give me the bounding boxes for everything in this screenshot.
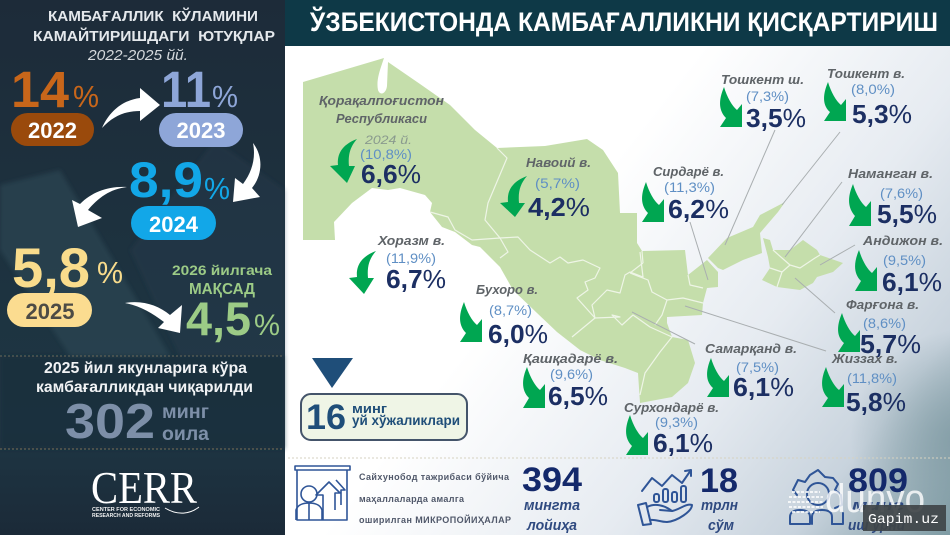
stat: 5,8% 2025: 2025 xyxy=(26,299,74,324)
left title: 2022-2025 йй. xyxy=(87,47,188,64)
stat: 8,9% 2024: % xyxy=(204,171,230,206)
region: Karakalpakstan: (10,8%) xyxy=(360,146,412,162)
panel: left achievements xyxy=(0,0,285,535)
callout: 16 thousand households: 16 xyxy=(306,398,346,437)
region: Kashkadarya: Қашқадарё в. xyxy=(523,351,618,366)
left title: КАМБАҒАЛЛИК КЎЛАМИНИ xyxy=(48,7,258,25)
stat: 18 trillion sum: сўм xyxy=(708,517,734,534)
region: Surkhandarya: 6,1% xyxy=(653,428,713,458)
stat: 2026 target 4,5%: % xyxy=(254,309,280,342)
text: Saikhunobod microprojects: Сайхунобод тажрибаси бўйича xyxy=(359,472,510,482)
arrow: 2025 to target xyxy=(125,302,182,333)
region: Khorezm: (11,9%) xyxy=(386,250,436,266)
region: Karakalpakstan: Қорақалпоғистон xyxy=(319,93,444,108)
stat: 809 thousand jobs: иш ўрни xyxy=(848,517,905,534)
text: Saikhunobod microprojects: оширилган МИКРОПОЙИҲАЛАР xyxy=(359,514,511,525)
region: Tashkent city: (7,3%) xyxy=(746,88,789,104)
region: Khorezm: Хоразм в. xyxy=(377,233,445,248)
region: Navoi: 4,2% xyxy=(528,192,590,222)
stat: 394 thousand projects xyxy=(522,461,582,534)
region: Surkhandarya: (9,3%) xyxy=(655,414,698,430)
region: Bukhara: Бухоро в. xyxy=(476,282,538,297)
region: Namangan: Наманган в. xyxy=(848,166,933,181)
stat: 809 thousand jobs xyxy=(848,462,908,534)
region: Fergana: 5,7% xyxy=(860,329,921,359)
region: Bukhara: (8,7%) xyxy=(489,302,532,318)
stat: 5,8% 2025 xyxy=(7,236,123,327)
stat: 14% 2022: % xyxy=(73,79,99,114)
region: Andijan: Андижон в. xyxy=(862,233,943,248)
map of Uzbekistan xyxy=(303,58,855,403)
header bar xyxy=(285,0,950,46)
watermark: Gapim.uz: Gapim.uz xyxy=(868,512,939,528)
leader lines xyxy=(632,130,855,351)
stat: 8,9% 2024: 2024 xyxy=(149,212,199,237)
stat: 11% 2023: 11 xyxy=(161,61,211,118)
arrow: 2024 to 2025 xyxy=(72,187,127,227)
region: Navoi: (5,7%) xyxy=(535,175,580,191)
region: Fergana: Фарғона в. xyxy=(846,297,919,312)
stat: 18 trillion sum: 18 xyxy=(700,462,738,500)
stat: 809 thousand jobs: 809 xyxy=(848,462,908,500)
region: Andijan: (9,5%) xyxy=(883,252,926,268)
region: Karakalpakstan: 6,6% xyxy=(361,159,421,189)
callout: 16 thousand households: минг xyxy=(352,401,388,416)
stat: 302 thousand families: оила xyxy=(162,424,209,445)
panel: map background xyxy=(285,45,950,535)
stat: 2026 target 4,5%: 4,5 xyxy=(186,292,251,345)
region: Fergana: (8,6%) xyxy=(863,315,906,331)
stat: 14% 2022: 14 xyxy=(11,61,70,118)
callout: 16 thousand households: уй хўжаликлари xyxy=(352,412,460,428)
region: Tashkent oblast xyxy=(824,66,912,129)
logo: CERR: CERR xyxy=(91,462,197,513)
region: Surkhandarya xyxy=(624,400,719,458)
region: Tashkent oblast: (8,0%) xyxy=(851,81,895,97)
region: Andijan: 6,1% xyxy=(882,267,942,297)
region: Andijan xyxy=(855,233,943,297)
logo: CERR: CENTER FOR ECONOMIC xyxy=(92,507,160,513)
text: Saikhunobod microprojects: маҳаллаларда амалга xyxy=(359,494,465,504)
region: Jizzakh xyxy=(822,351,906,417)
stat: 2026 target 4,5%: МАҚСАД xyxy=(189,281,256,298)
left title xyxy=(33,7,275,64)
stat: 2026 target 4,5% xyxy=(172,263,280,345)
stat: 8,9% 2024: 8,9 xyxy=(129,152,203,208)
region: Tashkent oblast: 5,3% xyxy=(852,99,912,129)
region: Samarkand: 6,1% xyxy=(733,372,794,402)
region: Syrdarya: 6,2% xyxy=(668,194,729,224)
stat: 14% 2022: 2022 xyxy=(28,118,77,143)
stat: 809 thousand jobs: минг xyxy=(852,497,904,514)
text: results 2025 xyxy=(36,360,253,396)
stat: 11% 2023: % xyxy=(212,79,238,114)
region: Tashkent city: 3,5% xyxy=(746,103,806,133)
region: Tashkent oblast: Тошкент в. xyxy=(827,66,905,81)
watermark: dunyo xyxy=(788,477,925,521)
stat: 302 thousand families: минг xyxy=(162,402,209,423)
stat: 8,9% 2024 xyxy=(129,152,230,240)
region: Surkhandarya: Сурхондарё в. xyxy=(624,400,719,415)
region: Samarkand xyxy=(705,341,797,402)
stat: 302 thousand families xyxy=(65,395,209,449)
stat: 11% 2023: 2023 xyxy=(177,118,225,143)
stat: 5,8% 2025: % xyxy=(97,255,123,290)
arrow: 2022 to 2023 xyxy=(102,88,160,128)
stat: 18 trillion sum: трлн xyxy=(701,497,738,514)
icon: gear with workers xyxy=(790,470,843,524)
region: Khorezm xyxy=(349,233,446,294)
region: Jizzakh: 5,8% xyxy=(846,387,906,417)
region: Karakalpakstan: 2024 й. xyxy=(364,133,412,147)
stat: 2026 target 4,5%: 2026 йилгача xyxy=(172,263,273,278)
region: Namangan: (7,6%) xyxy=(880,185,923,201)
region: Jizzakh: Жиззах в. xyxy=(831,351,898,366)
region: Kashkadarya: (9,6%) xyxy=(550,366,593,382)
stat: 394 thousand projects: лойиҳа xyxy=(526,517,577,534)
left title: КАМАЙТИРИШДАГИ ЮТУҚЛАР xyxy=(33,27,275,45)
region: Tashkent city: Тошкент ш. xyxy=(721,72,804,87)
region: Jizzakh: (11,8%) xyxy=(847,370,897,386)
icon: hand with growth chart xyxy=(638,470,692,525)
callout: 16 thousand households xyxy=(301,394,467,440)
region: Navoi: Навоий в. xyxy=(526,155,591,170)
region: Tashkent city xyxy=(720,72,806,133)
region: Navoi xyxy=(500,155,591,222)
region: Samarkand: (7,5%) xyxy=(736,359,779,375)
stat: 18 trillion sum xyxy=(700,462,738,534)
watermark: Gapim.uz xyxy=(863,505,946,531)
stat: 14% 2022 xyxy=(11,61,99,146)
region: Namangan xyxy=(848,166,937,229)
region: Karakalpakstan: Республикаси xyxy=(336,111,427,126)
region: Kashkadarya xyxy=(523,351,618,411)
stat: 5,8% 2025: 5,8 xyxy=(12,236,90,299)
region: Namangan: 5,5% xyxy=(877,199,937,229)
icon: down triangle xyxy=(312,358,353,388)
region: Bukhara: 6,0% xyxy=(488,319,548,349)
region: Samarkand: Самарқанд в. xyxy=(705,341,797,356)
region: Kashkadarya: 6,5% xyxy=(548,381,608,411)
arrow: 2023 to 2024 xyxy=(233,143,260,202)
text: results 2025: 2025 йил якунларига кўра xyxy=(44,360,247,377)
region: Syrdarya: (11,3%) xyxy=(664,179,715,195)
stat: 394 thousand projects: 394 xyxy=(522,461,582,499)
region: Syrdarya: Сирдарё в. xyxy=(653,164,724,179)
stat: 302 thousand families: 302 xyxy=(65,395,155,449)
text: Saikhunobod microprojects xyxy=(359,472,511,525)
stat: 11% 2023 xyxy=(159,61,243,147)
region: Karakalpakstan xyxy=(319,93,444,189)
watermark: dunyo: dunyo xyxy=(825,477,925,521)
logo: CERR: RESEARCH AND REFORMS xyxy=(92,513,161,519)
region: Bukhara xyxy=(460,282,548,349)
region: Khorezm: 6,7% xyxy=(386,264,446,294)
region: Fergana xyxy=(838,297,921,359)
region: Syrdarya xyxy=(642,164,729,224)
stat: 394 thousand projects: мингта xyxy=(524,497,580,514)
text: results 2025: камбағалликдан чиқарилди xyxy=(36,379,253,396)
icon: presentation with person xyxy=(295,466,350,520)
